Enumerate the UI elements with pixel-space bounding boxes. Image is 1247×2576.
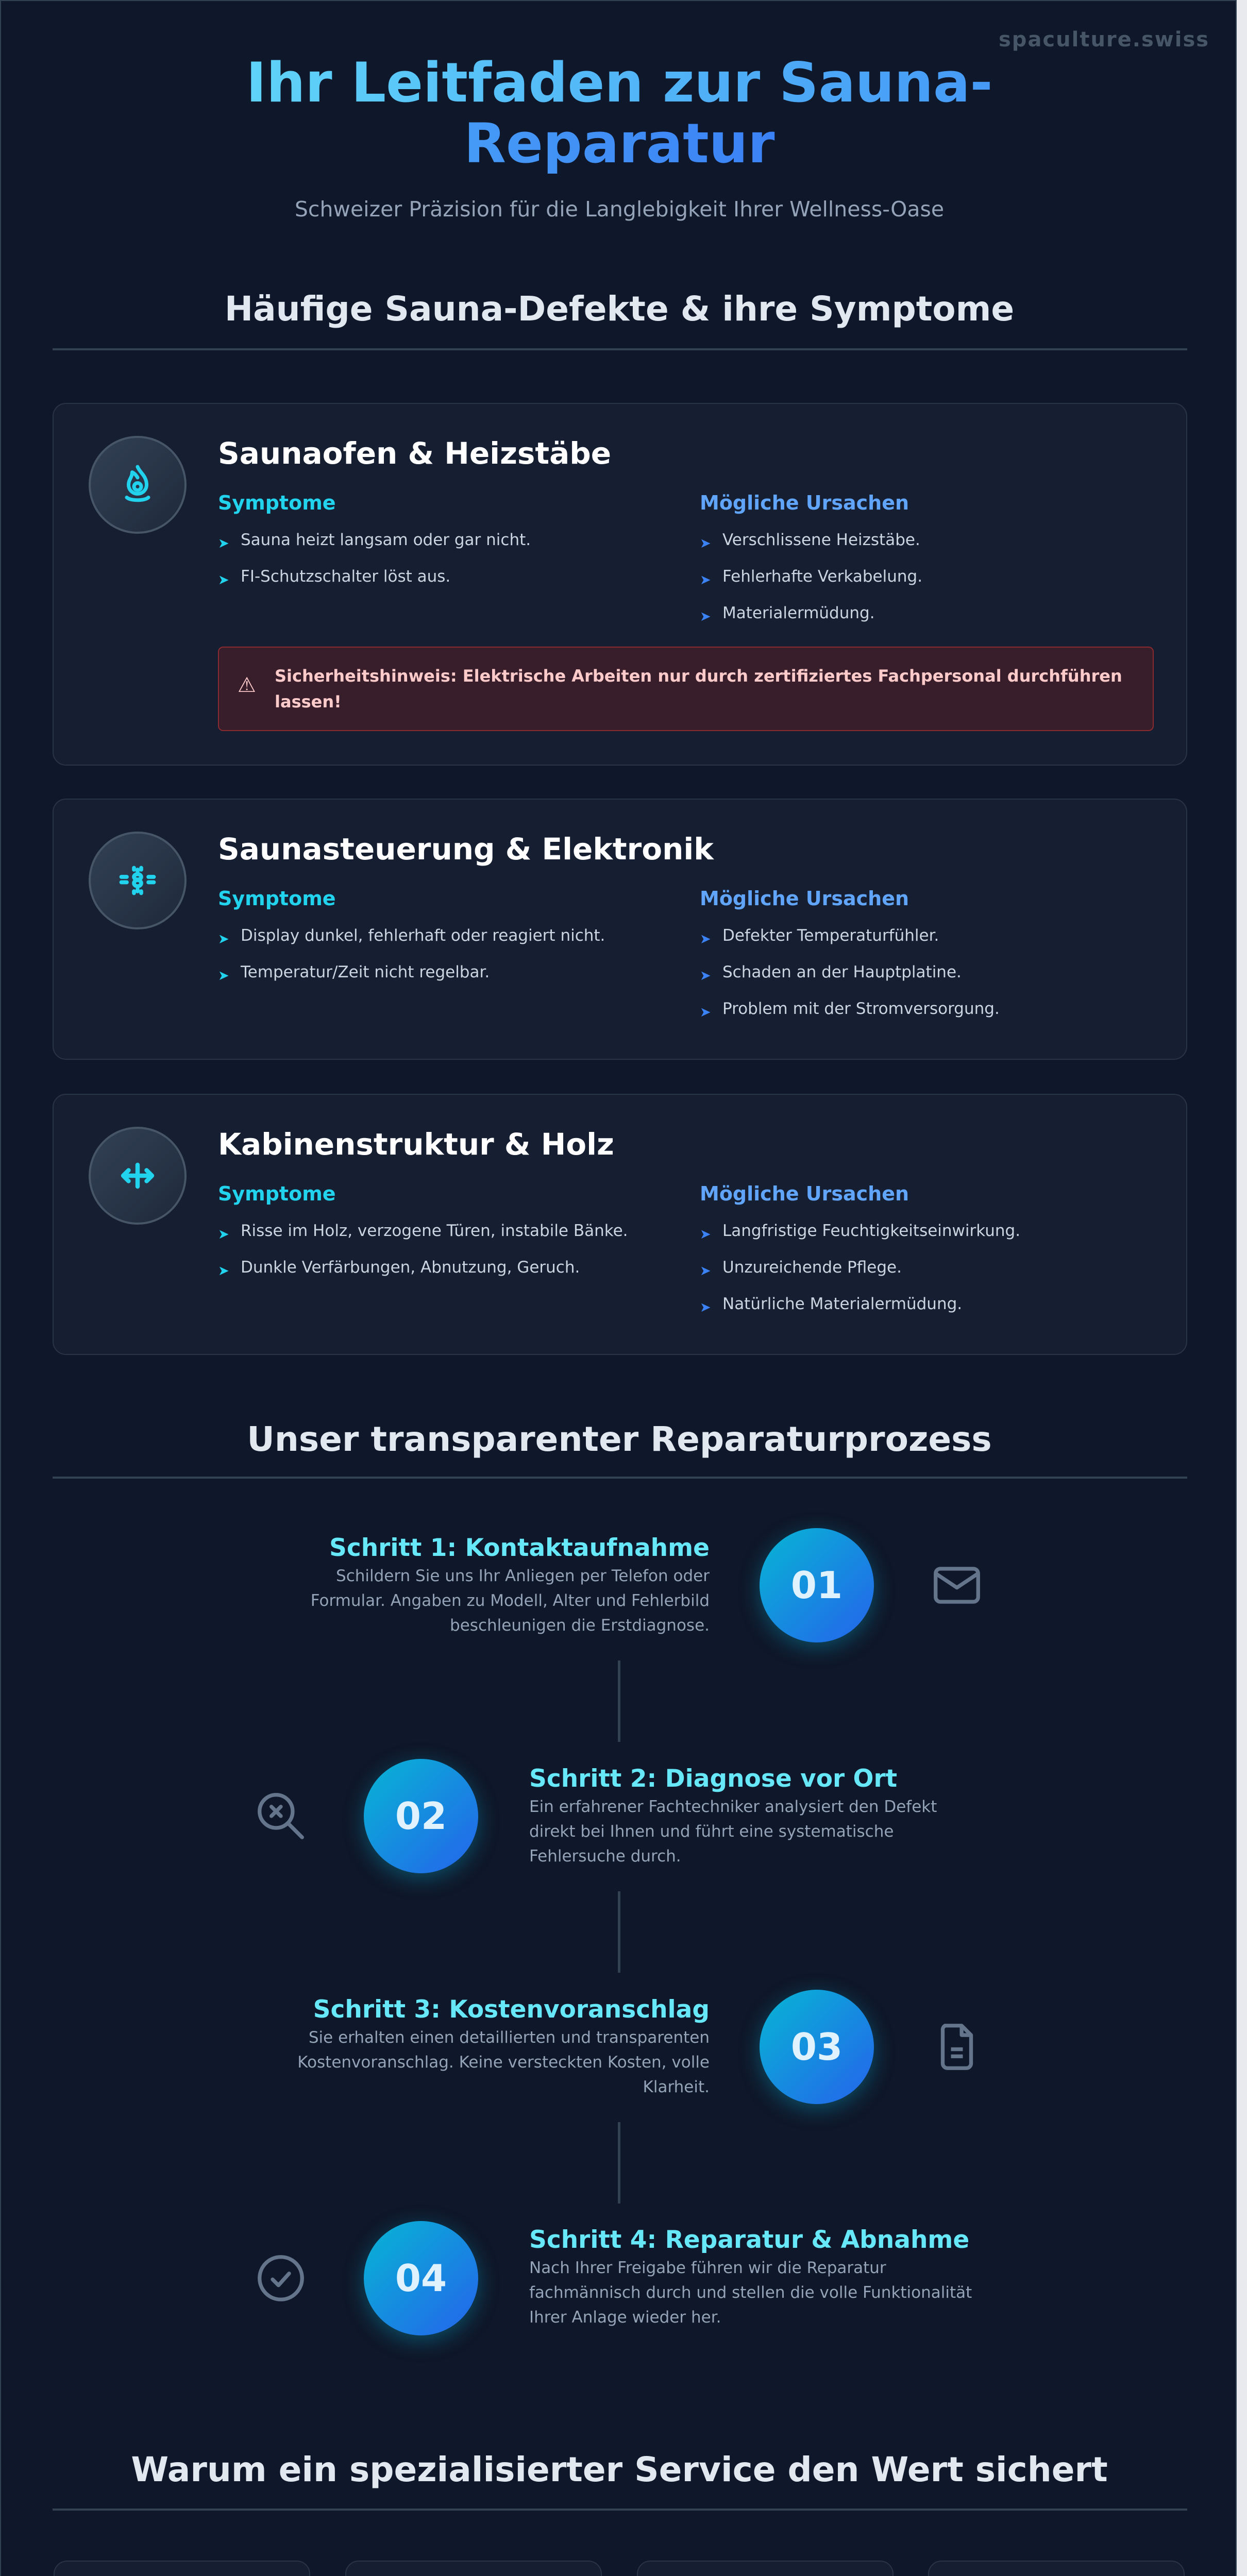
symptoms: ➤ [218, 572, 229, 588]
callout: safety warning [218, 647, 1154, 731]
title [246, 51, 992, 175]
causes: Problem mit der Stromversorgung. [722, 999, 1000, 1018]
symptoms [218, 1182, 628, 1279]
causes: Schaden an der Hauptplatine. [722, 963, 962, 981]
symptoms [218, 492, 531, 588]
icon: flame [89, 436, 187, 534]
panel: Kabine [53, 1094, 1187, 1355]
heading: process: Unser transparenter Reparaturprozess [247, 1419, 992, 1459]
callout: safety warning: ⚠ [238, 673, 256, 697]
causes: Mögliche Ursachen [700, 492, 909, 514]
causes: Fehlerhafte Verkabelung. [722, 567, 922, 586]
icon: chip [89, 832, 187, 929]
value card: Langlebigkeit [637, 2561, 894, 2576]
step 3 number: 03 [791, 2025, 842, 2069]
causes: ➤ [700, 931, 711, 947]
causes: Materialermüdung. [722, 604, 875, 622]
causes [700, 1182, 1020, 1315]
causes: ➤ [700, 609, 711, 624]
icon: arrows [89, 1127, 187, 1225]
heading: defects: Häufige Sauna-Defekte & ihre Symptome [225, 289, 1014, 329]
step 3: Schritt 3: Kostenvoranschlag [313, 1995, 710, 2024]
causes: ➤ [700, 1005, 711, 1020]
step 2 [529, 1765, 937, 1866]
title: Reparatur [464, 112, 775, 175]
icon: document [941, 2024, 973, 2070]
step 2: Ein erfahrener Fachtechniker analysiert den Defekt direkt bei Ihnen und führt eine systematische Fehlersuche durch. [529, 1798, 937, 1866]
causes: ➤ [700, 572, 711, 588]
icon: check [258, 2255, 304, 2301]
step 3 number [760, 1990, 874, 2104]
causes: ➤ [700, 1300, 711, 1315]
value card: Fachkompetenz [928, 2561, 1185, 2576]
card title: Saunaofen & Heizstäbe [218, 436, 611, 471]
step 1: Schritt 1: Kontaktaufnahme [329, 1534, 710, 1562]
subtitle: Schweizer Präzision für die Langlebigkeit Ihrer Wellness-Oase [295, 197, 944, 222]
step 4: Schritt 4: Reparatur & Abnahme [529, 2226, 969, 2254]
symptoms: Sauna heizt langsam oder gar nicht. [241, 531, 531, 549]
causes: Mögliche Ursachen [700, 887, 909, 910]
symptoms: Temperatur/Zeit nicht regelbar. [241, 963, 490, 981]
causes: ➤ [700, 536, 711, 551]
step 4 number: 04 [395, 2257, 447, 2300]
icon: envelope [934, 1567, 980, 1604]
value card: Sicherheit [345, 2561, 602, 2576]
watermark top: spaculture.swiss [999, 28, 1209, 52]
step 1 number: 01 [791, 1564, 842, 1607]
heading: value: Warum ein spezialisierter Service den Wert sichert [131, 2450, 1108, 2489]
symptoms: ➤ [218, 536, 229, 551]
causes: Defekter Temperaturfühler. [722, 926, 939, 945]
value card: Werterhalt [54, 2561, 310, 2576]
step 2 number: 02 [395, 1794, 447, 1838]
symptoms: ➤ [218, 1227, 229, 1242]
causes: Natürliche Materialermüdung. [722, 1295, 962, 1313]
card title: Kabinenstruktur & Holz [218, 1127, 614, 1162]
symptoms [218, 887, 605, 984]
symptoms: ➤ [218, 968, 229, 984]
step 4 number [364, 2221, 478, 2335]
causes [700, 887, 1000, 1020]
symptoms: Symptome [218, 492, 336, 514]
causes: Unzureichende Pflege. [722, 1258, 902, 1277]
step 2 number [364, 1759, 478, 1873]
callout: safety warning: Sicherheitshinweis: Elektrische Arbeiten nur durch zertifiziertes Fachpersonal durchführen lassen! [275, 666, 1122, 711]
symptoms: FI-Schutzschalter löst aus. [241, 567, 450, 586]
card title: Saunasteuerung & Elektronik [218, 832, 714, 867]
symptoms: Dunkle Verfärbungen, Abnutzung, Geruch. [241, 1258, 580, 1277]
connector [618, 1660, 620, 1742]
symptoms: ➤ [218, 1263, 229, 1279]
causes: ➤ [700, 968, 711, 984]
step 1 [311, 1534, 710, 1635]
causes: ➤ [700, 1263, 711, 1279]
causes: Verschlissene Heizstäbe. [722, 531, 920, 549]
causes: Mögliche Ursachen [700, 1182, 909, 1205]
symptoms: Symptome [218, 887, 336, 910]
title: Ihr Leitfaden zur Sauna- [246, 51, 992, 114]
causes [700, 492, 922, 624]
causes: ➤ [700, 1227, 711, 1242]
step 3: Sie erhalten einen detaillierten und transparenten Kostenvoranschlag. Keine versteckten Kosten, volle Klarheit. [297, 2028, 710, 2096]
icon: search [258, 1793, 304, 1839]
panel: Saunaofen [53, 403, 1187, 766]
connector [618, 1891, 620, 1973]
connector [618, 2122, 620, 2204]
symptoms: Display dunkel, fehlerhaft oder reagiert nicht. [241, 926, 605, 945]
symptoms: Symptome [218, 1182, 336, 1205]
step 1: Schildern Sie uns Ihr Anliegen per Telefon oder Formular. Angaben zu Modell, Alter und Fehlerbild beschleunigen die Erstdiagnose. [311, 1567, 710, 1635]
symptoms: ➤ [218, 931, 229, 947]
symptoms: Risse im Holz, verzogene Türen, instabile Bänke. [241, 1222, 628, 1240]
step 2: Schritt 2: Diagnose vor Ort [529, 1765, 897, 1793]
step 3 [297, 1995, 710, 2096]
step 1 number [760, 1528, 874, 1642]
panel: Steuerung [53, 799, 1187, 1060]
causes: Langfristige Feuchtigkeitseinwirkung. [722, 1222, 1020, 1240]
step 4 [529, 2226, 972, 2327]
step 4: Nach Ihrer Freigabe führen wir die Reparatur fachmännisch durch und stellen die volle Funktionalität Ihrer Anlage wieder her. [529, 2259, 972, 2327]
